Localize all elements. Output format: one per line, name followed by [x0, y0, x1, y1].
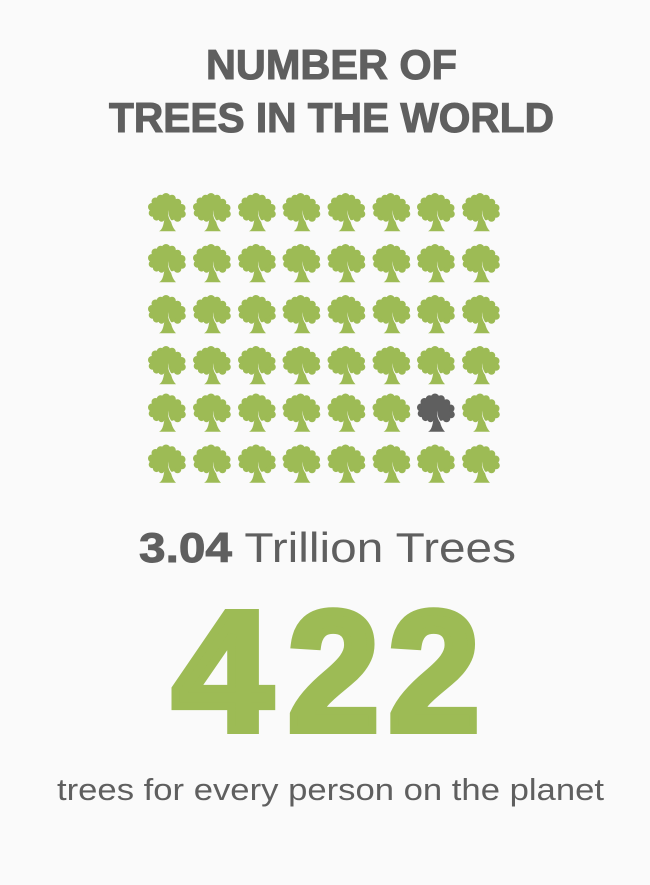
big number 422: 4 [173, 577, 272, 767]
caption: trees for every person on the planet [57, 772, 604, 807]
big number 422: 2 [388, 577, 480, 767]
title [109, 41, 554, 141]
big number 422 [173, 577, 480, 767]
total trees text: 3.04 Trillion Trees [139, 524, 516, 571]
title: NUMBER OF [206, 41, 457, 88]
title: TREES IN THE WORLD [109, 94, 554, 141]
tree pictogram grid [148, 193, 500, 483]
big number 422: 2 [288, 577, 379, 767]
